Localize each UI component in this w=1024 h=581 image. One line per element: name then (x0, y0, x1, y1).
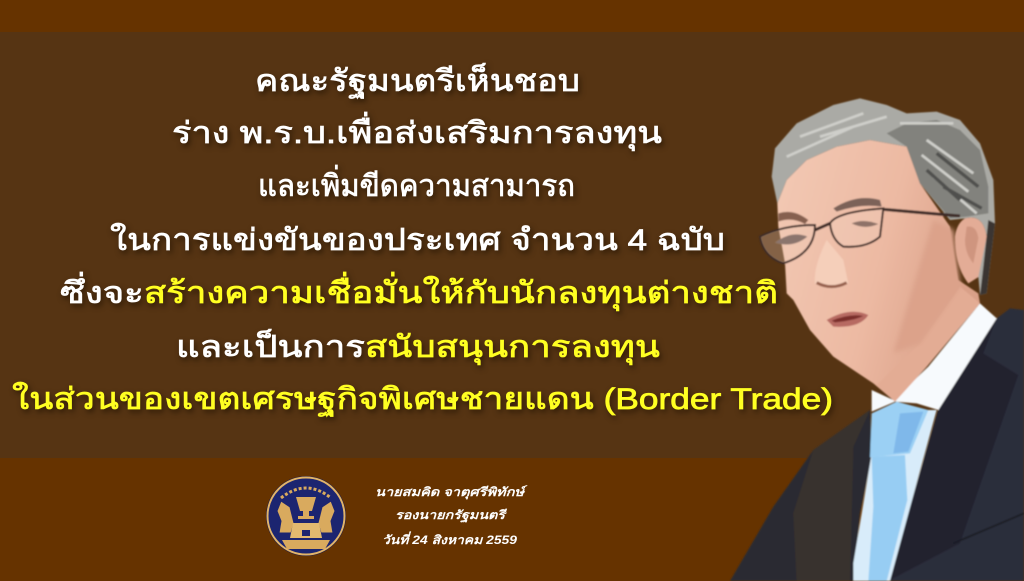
seal: base (290, 523, 322, 538)
headline text block: และเป็นการ สนับสนุนการลงทุน (176, 328, 660, 366)
headline text block (12, 62, 833, 417)
portrait of the deputy prime minister (730, 98, 1024, 581)
dark background panel (0, 32, 1024, 458)
headline text block: ร่าง พ.ร.บ.เพื่อส่งเสริมการลงทุน (172, 112, 662, 152)
ear (955, 217, 987, 283)
signature text block (375, 485, 528, 547)
headline text block: และเพิ่มขีดความสามารถ (258, 165, 575, 203)
seal: central urn (296, 497, 316, 519)
headline text block: คณะรัฐมนตรีเห็นชอบ (255, 62, 580, 99)
grey hair (772, 98, 995, 295)
headline text block: ในการแข่งขันของประเทศ จำนวน 4 ฉบับ (110, 223, 725, 257)
headline text block: ซึ่งจะ สร้างความเชื่อมั่นให้กับนักลงทุนต่างชาติ (60, 272, 778, 312)
signature text block: รองนายกรัฐมนตรี (395, 508, 508, 523)
government seal logo (266, 476, 346, 556)
seal: top arc (281, 488, 331, 498)
face (775, 140, 987, 402)
light blue tie (868, 402, 928, 581)
eyeglasses (760, 208, 960, 263)
eyes (852, 221, 878, 227)
signature text block: วันที่ 24 สิงหาคม 2559 (382, 531, 517, 547)
seal: left and right lions (277, 501, 294, 533)
eyebrows (833, 198, 882, 212)
signature text block: นายสมคิด จาตุศรีพิทักษ์ (375, 485, 528, 500)
shirt and collar (853, 303, 997, 581)
mouth (827, 312, 868, 327)
headline text block: ในส่วนของเขตเศรษฐกิจพิเศษชายแดน (Border Trade) (12, 382, 833, 417)
jacket (730, 308, 1024, 581)
